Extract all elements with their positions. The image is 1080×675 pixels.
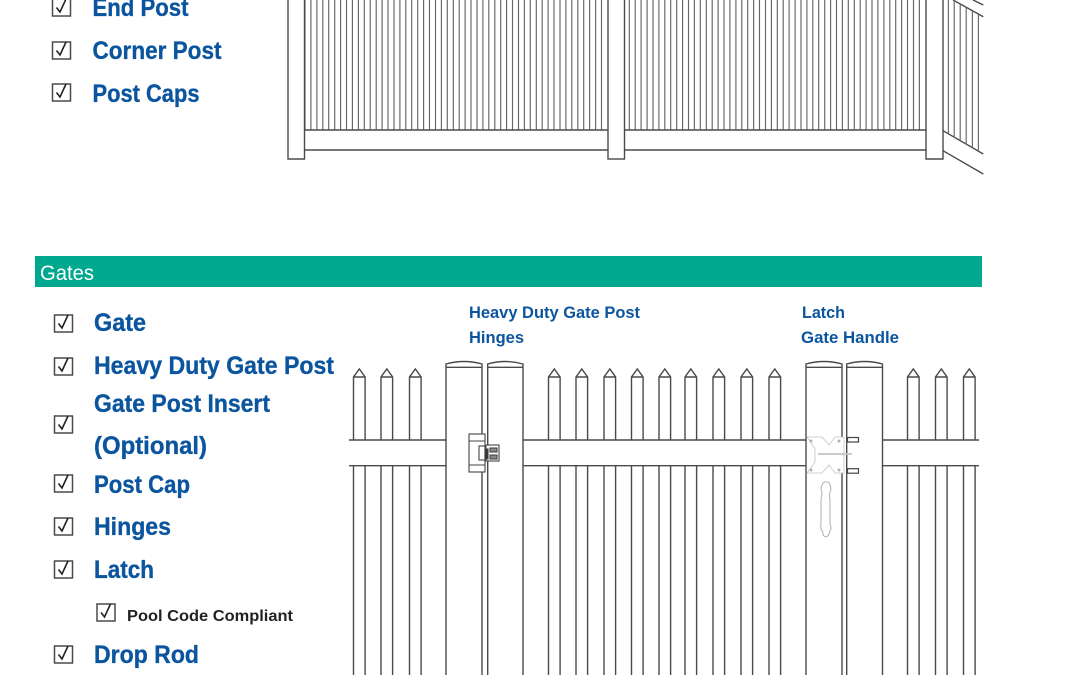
left post bbox=[288, 0, 304, 159]
icon: hinge straps bbox=[848, 438, 858, 473]
icon: gate handle bbox=[821, 482, 831, 537]
icon: gate latch bbox=[469, 434, 499, 472]
label: Heavy Duty Gate Post and Hinges: Hinges bbox=[469, 329, 524, 347]
item: Post Caps bbox=[52, 80, 200, 108]
item: Post Cap bbox=[54, 471, 190, 499]
item: Hinges bbox=[54, 513, 171, 541]
panel: gates checklist bbox=[54, 309, 335, 669]
item: End Post bbox=[52, 0, 189, 22]
panel: posts checklist bbox=[52, 0, 222, 108]
item: Gate Post Insert (Optional) bbox=[54, 390, 271, 460]
diagram: fence section with posts and rail bbox=[288, 0, 983, 174]
section header: Gates bbox=[35, 256, 982, 287]
item: Post Caps: Post Caps bbox=[92, 80, 200, 108]
item: Latch: Latch bbox=[94, 556, 154, 584]
item: Gate: Gate bbox=[94, 309, 146, 337]
corner post bbox=[926, 0, 943, 159]
item: Latch bbox=[54, 556, 154, 584]
section header: Gates: Gates bbox=[40, 261, 94, 285]
item: Gate Post Insert (Optional): Gate Post Insert bbox=[94, 390, 271, 418]
gate pickets bbox=[354, 369, 975, 675]
side return pickets bbox=[948, 0, 978, 152]
fence pickets bbox=[305, 0, 919, 130]
icon: gate hinge bbox=[807, 437, 852, 473]
label: Heavy Duty Gate Post and Hinges: Heavy Duty Gate Post bbox=[469, 304, 640, 322]
item: Gate Post Insert (Optional): (Optional) bbox=[94, 432, 207, 460]
item: Hinges: Hinges bbox=[94, 513, 171, 541]
bottom rail bbox=[304, 130, 926, 150]
item: Gate bbox=[54, 309, 146, 337]
item: Heavy Duty Gate Post: Heavy Duty Gate Post bbox=[94, 352, 335, 380]
diagram: gate with posts bbox=[349, 362, 979, 675]
left gate post pair bbox=[446, 362, 523, 675]
side return fence bbox=[943, 0, 983, 174]
label: Latch and Gate Handle: Latch bbox=[802, 304, 845, 322]
item: Drop Rod: Drop Rod bbox=[94, 641, 199, 669]
item: Pool Code Compliant bbox=[97, 604, 294, 625]
item: Post Cap: Post Cap bbox=[94, 471, 190, 499]
item: Pool Code Compliant: Pool Code Compliant bbox=[127, 608, 294, 625]
label: Latch and Gate Handle bbox=[801, 304, 899, 347]
item: Corner Post: Corner Post bbox=[92, 37, 222, 65]
label: Latch and Gate Handle: Gate Handle bbox=[801, 329, 899, 347]
right gate post pair bbox=[806, 362, 882, 675]
item: Drop Rod bbox=[54, 641, 199, 669]
label: Heavy Duty Gate Post and Hinges bbox=[469, 304, 640, 347]
middle post bbox=[608, 0, 624, 159]
gate rails bbox=[349, 440, 979, 466]
